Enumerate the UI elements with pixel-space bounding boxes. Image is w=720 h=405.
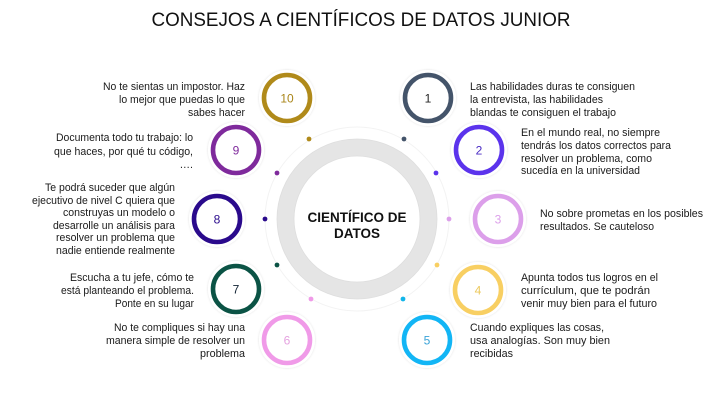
tip 7 <box>61 272 194 310</box>
central hub <box>265 127 449 311</box>
badge 10: 10 <box>280 92 294 106</box>
badge 6: 6 <box>284 334 291 348</box>
badge 2 <box>451 122 507 178</box>
tip 1 <box>470 81 635 119</box>
tip 8: Te podrá suceder que algún <box>45 182 175 194</box>
title: CONSEJOS A CIENTÍFICOS DE DATOS JUNIOR <box>152 8 570 31</box>
tip 6 <box>106 322 245 360</box>
badge 3 <box>470 191 526 247</box>
badge 1 <box>400 70 456 126</box>
tip 6: No te compliques si hay una <box>114 322 245 334</box>
tip 5 <box>470 322 610 360</box>
tip 7: Ponte en su lugar <box>115 298 194 310</box>
badge 8: 8 <box>214 212 221 226</box>
tip 9: que haces, por qué tu código, <box>54 146 193 158</box>
tip 10: lo mejor que puedas lo que <box>119 94 245 106</box>
badge 5: 5 <box>424 334 431 348</box>
badge 9 <box>208 122 264 178</box>
tip 4 <box>521 272 658 310</box>
tip 4: venir muy bien para el futuro <box>521 298 657 310</box>
tip 9 <box>54 132 193 171</box>
tip 10: No te sientas un impostor. Haz <box>103 81 245 93</box>
tip 8: ejecutivo de nivel C quiera que <box>32 195 175 207</box>
tip 1: blandas te consiguen el trabajo <box>470 107 616 119</box>
tip 5: usa analogías. Son muy bien <box>470 335 610 347</box>
tip 7: está planteando el problema. <box>61 285 194 297</box>
tip 4: Apunta todos tus logros en el <box>521 272 658 284</box>
badge 7 <box>208 261 264 317</box>
tip 5: recibidas <box>470 348 513 360</box>
tip 8: desarrolle un análisis para <box>53 220 175 232</box>
tip 1: Las habilidades duras te consiguen <box>470 81 635 93</box>
central hub: DATOS <box>334 226 380 241</box>
badge 7: 7 <box>233 282 240 296</box>
tip 9: Documenta todo tu trabajo: lo <box>56 132 193 144</box>
tip 9: …. <box>179 159 193 171</box>
tip 3 <box>540 208 703 233</box>
tip 2: sucedía en la universidad <box>521 165 640 177</box>
tip 2: resolver un problema, como <box>521 153 652 165</box>
tip 4: currículum, que te podrán <box>521 285 650 297</box>
tip 1: la entrevista, las habilidades <box>470 94 603 106</box>
tip 7: Escucha a tu jefe, cómo te <box>70 272 194 284</box>
tip 3: No sobre prometas en los posibles <box>540 208 703 220</box>
tip 10 <box>103 81 245 119</box>
badge 8 <box>189 191 245 247</box>
badge 1: 1 <box>425 92 432 106</box>
badge 9: 9 <box>233 144 240 158</box>
badge 2: 2 <box>476 144 483 158</box>
tip 2: tendrás los datos correctos para <box>521 140 671 152</box>
tip 8: resolver un problema que <box>56 232 175 244</box>
tip 8 <box>32 182 175 257</box>
tip 2 <box>521 127 671 177</box>
tip 5: Cuando expliques las cosas, <box>470 322 604 334</box>
badge 10 <box>259 70 315 126</box>
badge 4 <box>450 262 506 318</box>
tip 8: construyas un modelo o <box>63 207 175 219</box>
connector dots <box>263 137 451 301</box>
tip 2: En el mundo real, no siempre <box>521 127 660 139</box>
tip 6: manera simple de resolver un <box>106 335 245 347</box>
tip 3: resultados. Se cauteloso <box>540 221 654 233</box>
badge 3: 3 <box>495 212 502 226</box>
tip 6: problema <box>200 348 245 360</box>
hub label: CIENTÍFICO DE <box>307 210 407 225</box>
tip 10: sabes hacer <box>188 107 245 119</box>
tip 8: nadie entiende realmente <box>56 245 175 257</box>
badge 6 <box>259 312 315 368</box>
badge 5 <box>399 312 455 368</box>
badge 4: 4 <box>475 284 482 298</box>
